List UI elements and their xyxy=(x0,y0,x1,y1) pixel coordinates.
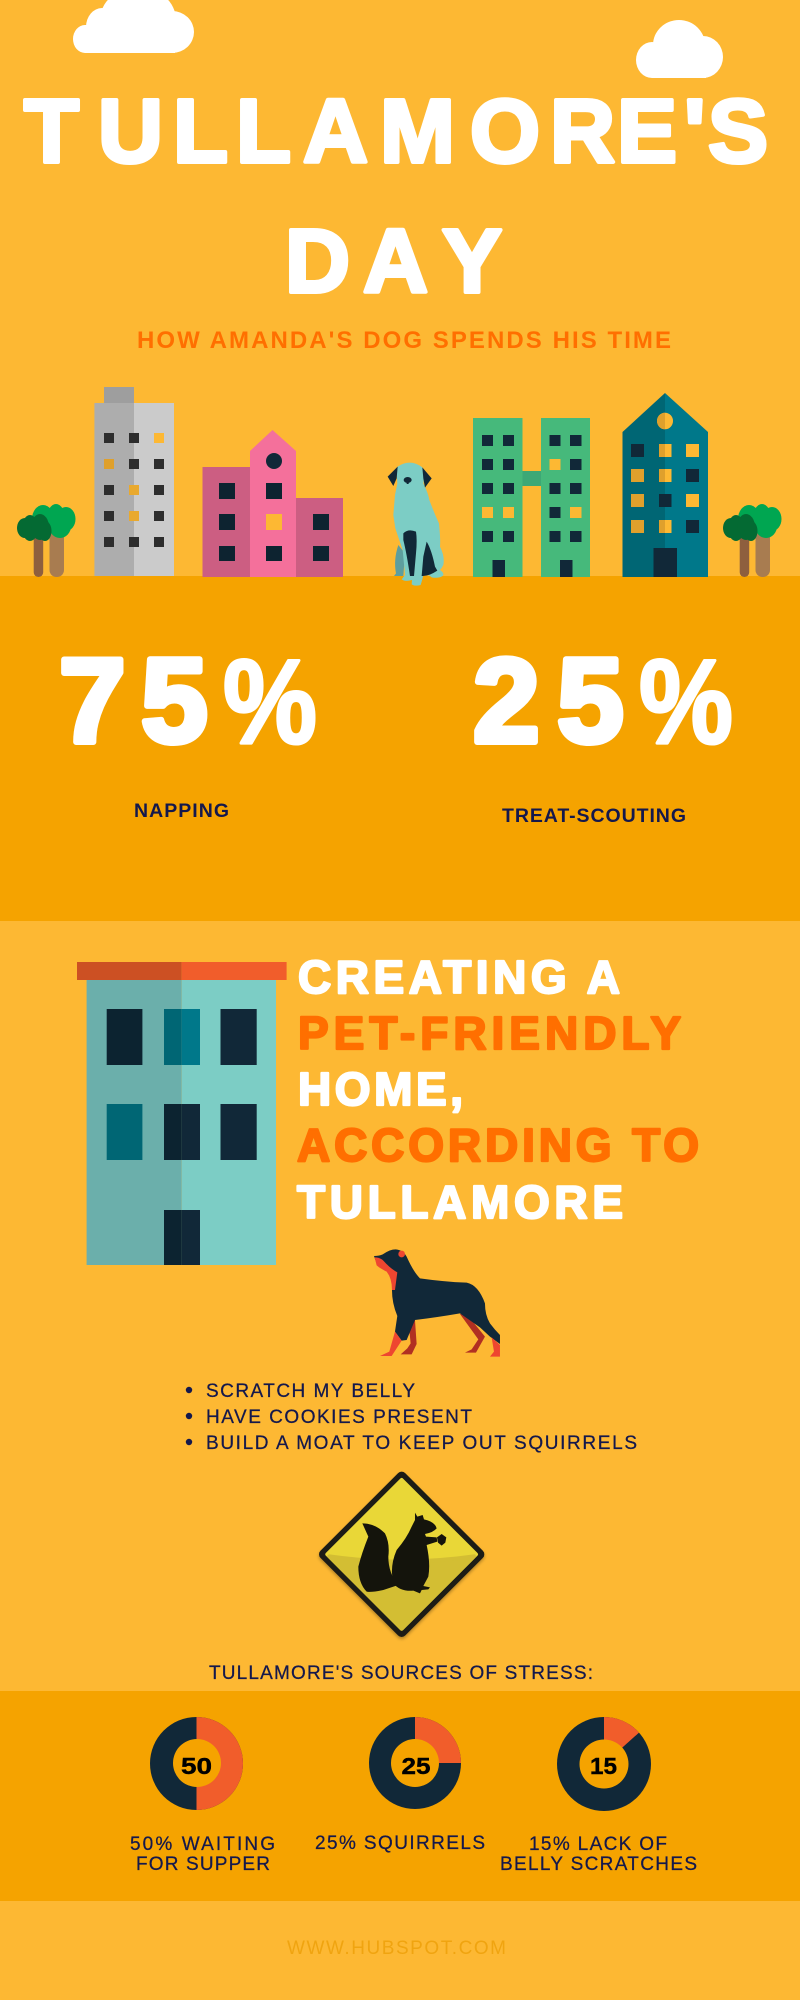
list item 2: HAVE COOKIES PRESENT xyxy=(206,1407,472,1428)
stat label napping: NAPPING xyxy=(134,800,229,822)
stat number 25: 25 xyxy=(473,634,624,768)
bulleted list xyxy=(186,1381,637,1454)
donut label 50: FOR SUPPER xyxy=(136,1854,270,1875)
donut chart: 15 lack of belly scratches xyxy=(500,1717,697,1875)
title line 1: TULLAMORE'S xyxy=(24,82,768,182)
donut chart: 25 squirrels xyxy=(315,1717,485,1854)
heading line 1: CREATING A xyxy=(298,951,620,1003)
donut label 15 xyxy=(500,1834,697,1875)
donut value 25: 25 xyxy=(402,1753,431,1779)
icon: green twin towers xyxy=(473,418,590,577)
stat: 75% napping xyxy=(59,634,317,822)
subtitle: HOW AMANDA'S DOG SPENDS HIS TIME xyxy=(137,327,671,354)
donut value 15: 15 xyxy=(590,1753,617,1779)
heading line 3: HOME, xyxy=(298,1063,463,1115)
donut label 50 xyxy=(130,1834,275,1875)
stat percent sign: % xyxy=(223,635,317,769)
donut label 15: BELLY SCRATCHES xyxy=(500,1854,697,1875)
heading: sources of stress: TULLAMORE'S SOURCES OF STRESS: xyxy=(209,1663,593,1684)
heading: creating a pet-friendly home xyxy=(297,951,699,1228)
donut value 50: 50 xyxy=(181,1753,212,1779)
list item 1: SCRATCH MY BELLY xyxy=(206,1381,415,1402)
icon: cloud left xyxy=(73,0,194,53)
icon: teal apartment building xyxy=(77,962,287,1265)
illustration: city skyline xyxy=(17,387,782,586)
donut label 50: 50% WAITING xyxy=(130,1834,275,1855)
heading line 5: TULLAMORE xyxy=(297,1176,623,1228)
footer url: WWW.HUBSPOT.COM xyxy=(287,1938,506,1959)
icon: teal dog sitting xyxy=(388,463,444,586)
icon: trees right xyxy=(723,504,782,577)
donut label 25: 25% SQUIRRELS xyxy=(315,1833,485,1854)
icon: pink house xyxy=(202,430,343,577)
stat percent sign: % xyxy=(639,635,733,769)
icon: squirrel warning sign xyxy=(324,1477,479,1632)
list item 3: BUILD A MOAT TO KEEP OUT SQUIRRELS xyxy=(206,1433,637,1454)
donut chart: 50 waiting for supper xyxy=(130,1717,275,1875)
icon: grey tower xyxy=(94,387,174,576)
title line 2: DAY xyxy=(285,212,502,312)
stat label treat-scouting: TREAT-SCOUTING xyxy=(502,805,686,827)
stat number 75: 75 xyxy=(59,634,208,768)
heading line 4: ACCORDING TO xyxy=(297,1119,699,1171)
icon: blue gabled building xyxy=(622,393,708,577)
icon: rottweiler dog xyxy=(374,1249,500,1357)
donut label 15: 15% LACK OF xyxy=(529,1834,667,1855)
icon: cloud right xyxy=(636,20,723,78)
heading line 2: PET-FRIENDLY xyxy=(298,1007,681,1059)
title xyxy=(24,82,768,312)
icon: trees left xyxy=(17,504,76,577)
stat: 25% treat-scouting xyxy=(473,634,733,827)
